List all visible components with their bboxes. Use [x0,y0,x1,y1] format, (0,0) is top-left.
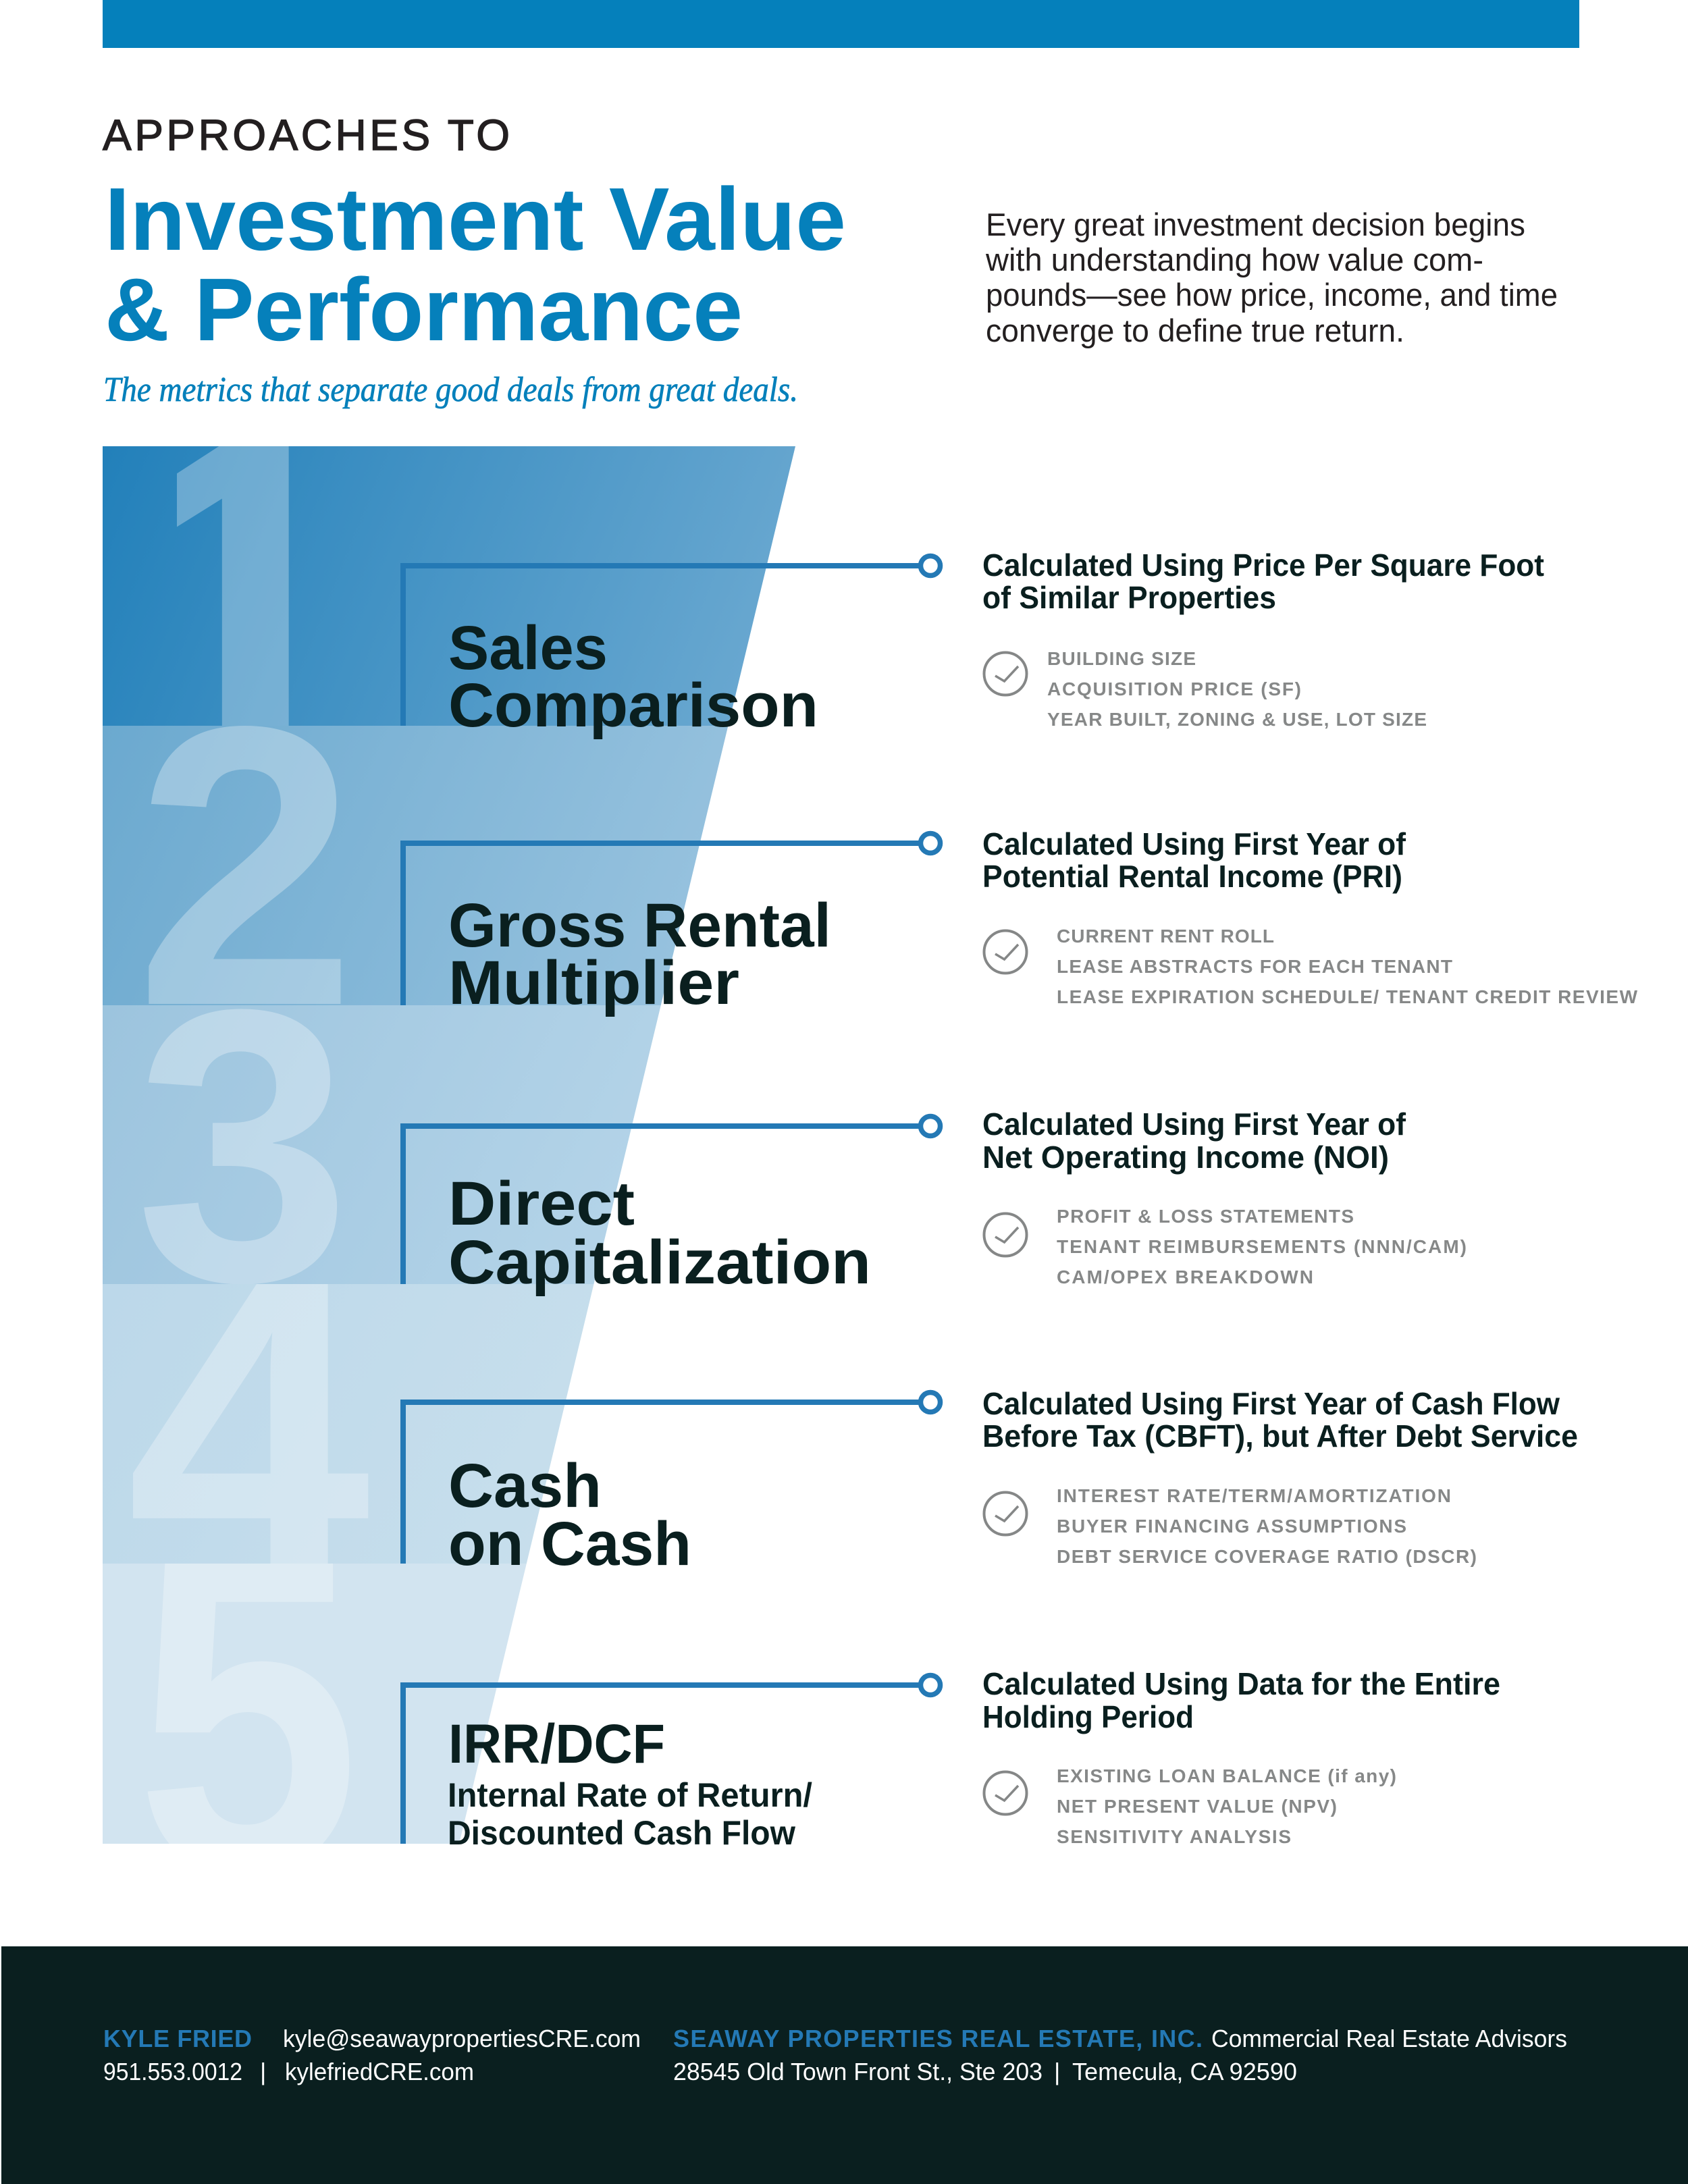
connector 3 [403,1117,940,1284]
title [105,169,846,359]
items 2: LEASE ABSTRACTS FOR EACH TENANT [1057,956,1452,977]
numeral 3: 3 [135,928,351,1362]
connector 1 [403,556,940,726]
items 5: SENSITIVITY ANALYSIS [1057,1826,1291,1847]
label: gross rental multiplier: Multiplier [448,949,739,1017]
intro paragraph: Every great investment decision begins [986,207,1525,242]
heading 1 [982,548,1544,615]
icon: check 1 [984,652,1026,695]
contact: kyle fried: KYLE FRIED [103,2025,252,2052]
items 3 [1057,1206,1467,1287]
band 3 [103,1005,661,1284]
items 3: CAM/OPEX BREAKDOWN [1057,1267,1313,1287]
company: seaway properties [673,2025,1567,2085]
detail 2 [982,826,1638,1007]
heading 3: Calculated Using First Year of [982,1107,1406,1142]
items 5 [1057,1765,1396,1847]
numeral 4: 4 [126,1183,373,1673]
funnel graphic [103,446,845,1844]
icon: check 5 [984,1772,1026,1815]
items 3: TENANT REIMBURSEMENTS (NNN/CAM) [1057,1236,1467,1257]
company: seaway properties: 28545 Old Town Front St., Ste 203 [673,2058,1043,2085]
numeral 2: 2 [135,644,357,1089]
heading 4: Before Tax (CBFT), but After Debt Service [982,1418,1578,1454]
label: sales comparison: Sales [448,614,608,683]
contact: kyle fried: kyle@seawaypropertiesCRE.com [283,2025,641,2052]
items 1: ACQUISITION PRICE (SF) [1047,678,1301,699]
items 4: INTEREST RATE/TERM/AMORTIZATION [1057,1485,1451,1506]
detail 5 [982,1666,1500,1847]
heading 3 [982,1107,1406,1175]
heading 3: Net Operating Income (NOI) [982,1140,1389,1175]
label: cash on cash [448,1451,691,1578]
connector 4 [403,1392,940,1564]
heading 5: Holding Period [982,1699,1194,1734]
intro paragraph [985,207,1558,348]
icon: check 3 [984,1214,1026,1256]
label: irr/dcf: Discounted Cash Flow [448,1814,795,1852]
items 4 [1057,1485,1477,1567]
detail 3 [982,1107,1467,1287]
contact: kyle fried [103,2025,641,2085]
items 2: LEASE EXPIRATION SCHEDULE/ TENANT CREDIT REVIEW [1057,986,1638,1007]
subtitle: The metrics that separate good deals from great deals. [103,371,798,409]
label: irr/dcf: IRR/DCF [448,1713,665,1775]
label: irr/dcf [448,1713,812,1852]
connector 2 [403,833,940,1005]
contact: kyle fried: kylefriedCRE.com [285,2058,474,2085]
title: Investment Value [105,169,846,269]
intro paragraph: converge to define true return. [986,313,1404,348]
connector 5 [403,1676,940,1844]
items 5: NET PRESENT VALUE (NPV) [1057,1796,1337,1817]
numeral 1: 1 [109,336,379,880]
band 2 [103,726,728,1005]
contact: kyle fried: 951.553.0012 [103,2058,242,2085]
label: cash on cash: on Cash [448,1510,691,1578]
label: gross rental multiplier: Gross Rental [448,891,831,960]
heading 4 [982,1386,1578,1454]
items 1: BUILDING SIZE [1047,648,1196,669]
heading 4: Calculated Using First Year of Cash Flow [982,1386,1560,1421]
band 5 [103,1564,527,1844]
footer background [1,1946,1688,2184]
items 1 [1047,648,1427,730]
heading 5: Calculated Using Data for the Entire [982,1666,1500,1701]
label: direct capitalization: Capitalization [448,1228,871,1297]
contact: kyle fried: | [260,2058,266,2085]
heading 5 [982,1666,1500,1734]
items 2: CURRENT RENT ROLL [1057,926,1274,947]
icon: check 2 [984,930,1026,974]
intro paragraph: with understanding how value com- [985,242,1483,277]
label: cash on cash: Cash [448,1451,602,1520]
band 1 [103,446,845,726]
label: sales comparison [448,614,818,740]
heading 2: Potential Rental Income (PRI) [982,859,1402,894]
footer [1,1946,1688,2184]
items 4: DEBT SERVICE COVERAGE RATIO (DSCR) [1057,1546,1477,1567]
heading 2: Calculated Using First Year of [982,826,1406,861]
heading 1: Calculated Using Price Per Square Foot [982,548,1544,583]
items 5: EXISTING LOAN BALANCE (if any) [1057,1765,1396,1786]
company: seaway properties: | [1054,2058,1060,2085]
label: direct capitalization: Direct [448,1169,635,1238]
items 4: BUYER FINANCING ASSUMPTIONS [1057,1516,1406,1537]
header [103,111,846,409]
label: direct capitalization [448,1169,871,1297]
label: sales comparison: Comparison [448,671,818,740]
detail 4 [982,1386,1578,1567]
company: seaway properties: Temecula, CA 92590 [1072,2058,1297,2085]
label: irr/dcf: Internal Rate of Return/ [448,1776,812,1814]
kicker: approaches to: APPROACHES TO [103,111,510,159]
title: & Performance [105,260,743,359]
items 2 [1057,926,1638,1007]
heading 2 [982,826,1406,894]
intro paragraph: pounds—see how price, income, and time [986,277,1558,313]
company: seaway properties: SEAWAY PROPERTIES REAL ESTATE, INC. [673,2025,1203,2052]
numeral 5: 5 [135,1456,361,1967]
items 3: PROFIT & LOSS STATEMENTS [1057,1206,1354,1227]
band 4 [103,1284,594,1564]
icon: check 4 [984,1492,1026,1535]
heading 1: of Similar Properties [982,580,1276,615]
company: seaway properties: Commercial Real Estate Advisors [1211,2025,1567,2052]
detail 1 [982,548,1544,730]
top bar [103,0,1579,48]
label: gross rental multiplier [448,891,831,1017]
items 1: YEAR BUILT, ZONING & USE, LOT SIZE [1047,709,1427,730]
